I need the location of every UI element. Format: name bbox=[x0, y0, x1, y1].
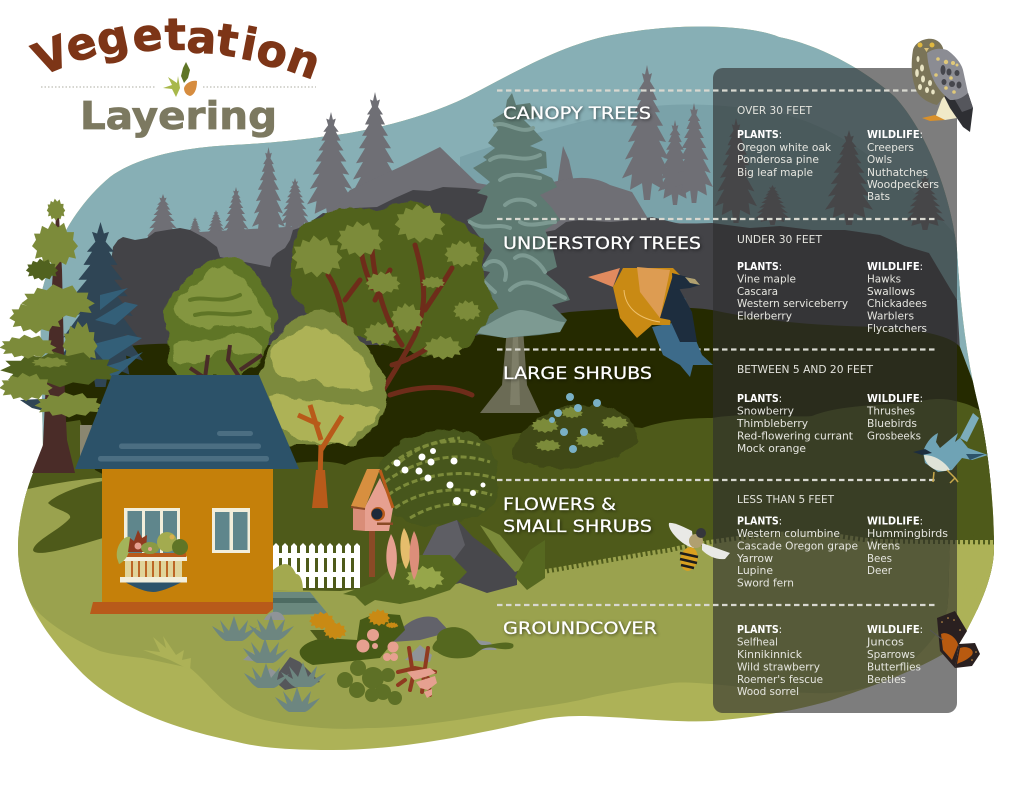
details: understory trees: Swallows bbox=[867, 286, 915, 298]
icon: butterfly bbox=[930, 611, 980, 668]
tall spruce bbox=[467, 93, 570, 413]
details: large shrubs: Thimbleberry bbox=[736, 418, 808, 430]
details: canopy trees: Woodpeckers bbox=[867, 179, 939, 191]
details: groundcover: Wood sorrel bbox=[737, 686, 799, 698]
flower box bbox=[117, 530, 188, 592]
details: flowers and small shrubs: Wrens bbox=[867, 540, 900, 552]
details: understory trees: Chickadees bbox=[867, 298, 927, 310]
snowberry shrub with blue berries bbox=[512, 393, 640, 468]
details: canopy trees: OVER 30 FEET bbox=[737, 105, 813, 117]
birdhouse bbox=[351, 469, 393, 577]
details: groundcover: Butterflies bbox=[867, 662, 921, 674]
details: flowers and small shrubs: PLANTS: bbox=[737, 516, 782, 528]
details: flowers and small shrubs: Deer bbox=[867, 565, 893, 577]
dark grey treeline bbox=[100, 187, 960, 360]
details: canopy trees: Bats bbox=[867, 191, 890, 203]
roof highlights bbox=[98, 431, 269, 462]
layer heading: flowers and small shrubs: FLOWERS & bbox=[503, 495, 616, 515]
layer heading: groundcover: GROUNDCOVER bbox=[503, 619, 657, 639]
light ground bbox=[0, 478, 950, 729]
red and pink plant bbox=[398, 648, 437, 698]
details: large shrubs: Snowberry bbox=[737, 406, 794, 418]
details: large shrubs bbox=[736, 364, 923, 455]
layer heading: large shrubs: LARGE SHRUBS bbox=[503, 364, 652, 384]
details: understory trees: PLANTS: bbox=[737, 261, 782, 273]
distant grey forest bbox=[145, 65, 945, 254]
white flowering shrub bbox=[378, 429, 499, 526]
dark ground bbox=[40, 307, 995, 490]
picket fence bbox=[273, 543, 360, 588]
details: flowers and small shrubs: Cascade Oregon grape bbox=[737, 540, 858, 552]
scene: mountains, treeline and dark ground bbox=[40, 147, 995, 490]
details: canopy trees bbox=[737, 105, 939, 203]
house roof bbox=[75, 375, 299, 469]
window left bbox=[124, 508, 180, 558]
lupine flowers and foliage bbox=[343, 528, 467, 606]
details: large shrubs: Bluebirds bbox=[867, 418, 917, 430]
details: large shrubs: Thrushes bbox=[866, 406, 915, 418]
marigolds and moss bbox=[300, 609, 405, 665]
details: groundcover bbox=[737, 624, 923, 698]
sky band bbox=[460, 105, 960, 300]
arbutus tree bbox=[290, 200, 497, 395]
details: groundcover: Roemer's fescue bbox=[737, 674, 823, 686]
ground shadow blob bbox=[33, 481, 103, 553]
title word: Layering: Layering bbox=[80, 94, 277, 138]
lobed plant bbox=[337, 660, 402, 705]
trailing green plant bbox=[432, 627, 514, 658]
layer heading: flowers and small shrubs: SMALL SHRUBS bbox=[503, 517, 652, 537]
small rocks bbox=[243, 612, 497, 690]
icon: hawk in flight bbox=[588, 267, 713, 377]
details: flowers and small shrubs: Sword fern bbox=[737, 578, 794, 590]
icon: bee bbox=[669, 523, 730, 573]
details: understory trees: Elderberry bbox=[737, 310, 792, 322]
title bbox=[26, 9, 327, 138]
details: groundcover: Beetles bbox=[867, 674, 906, 686]
dotted rule bbox=[41, 86, 316, 88]
details: groundcover: PLANTS: bbox=[737, 624, 782, 636]
grass fringe bbox=[512, 531, 995, 574]
details: flowers and small shrubs: Western columbine bbox=[737, 528, 840, 540]
details: large shrubs: WILDLIFE: bbox=[867, 393, 923, 405]
info panel bbox=[713, 68, 957, 713]
details: understory trees: Western serviceberry bbox=[737, 298, 848, 310]
details: groundcover: WILDLIFE: bbox=[867, 624, 923, 636]
details: understory trees: Hawks bbox=[867, 274, 901, 286]
grass tufts bbox=[144, 636, 191, 668]
divider lines bbox=[497, 90, 937, 605]
bush by the step bbox=[273, 564, 303, 591]
agave plants bbox=[212, 615, 326, 712]
round tree bbox=[166, 258, 277, 378]
rock with fern bbox=[420, 520, 545, 593]
light tree with orange trunk bbox=[261, 310, 386, 508]
icon: owl bbox=[912, 39, 973, 132]
details: large shrubs: Red-flowering currant bbox=[737, 430, 853, 442]
details: canopy trees: Big leaf maple bbox=[737, 167, 813, 179]
blue conifer bbox=[20, 222, 143, 415]
details: groundcover: Sparrows bbox=[867, 649, 915, 661]
details: understory trees: UNDER 30 FEET bbox=[737, 234, 823, 246]
details: groundcover: Wild strawberry bbox=[737, 662, 820, 674]
icon: blue jay bbox=[913, 413, 988, 483]
details: flowers and small shrubs: LESS THAN 5 FEET bbox=[737, 494, 835, 506]
house wall bbox=[102, 469, 273, 602]
layer heading: understory trees: UNDERSTORY TREES bbox=[503, 234, 701, 254]
details: understory trees bbox=[737, 234, 927, 335]
details: understory trees: Flycatchers bbox=[867, 323, 927, 335]
steps bbox=[273, 592, 328, 615]
details: understory trees: Cascara bbox=[737, 286, 778, 298]
details: flowers and small shrubs bbox=[736, 494, 948, 590]
details: canopy trees: Owls bbox=[867, 154, 892, 166]
house bbox=[75, 375, 328, 615]
groundcover garden bbox=[212, 609, 514, 712]
details: understory trees: Warblers bbox=[867, 310, 914, 322]
details: canopy trees: PLANTS: bbox=[737, 129, 782, 141]
details: flowers and small shrubs: Yarrow bbox=[736, 553, 774, 565]
details: canopy trees: WILDLIFE: bbox=[867, 129, 923, 141]
details: large shrubs: Grosbeeks bbox=[867, 430, 921, 442]
title word: Vegetation: Vegetation bbox=[26, 9, 327, 90]
layer heading: canopy trees: CANOPY TREES bbox=[503, 104, 651, 124]
details: canopy trees: Ponderosa pine bbox=[737, 154, 819, 166]
foundation bbox=[90, 602, 273, 614]
details: large shrubs: Mock orange bbox=[737, 443, 806, 455]
details: canopy trees: Oregon white oak bbox=[737, 142, 831, 154]
details: flowers and small shrubs: Lupine bbox=[737, 565, 773, 577]
details: flowers and small shrubs: WILDLIFE: bbox=[867, 516, 923, 528]
left conifer bbox=[0, 199, 120, 473]
details: canopy trees: Creepers bbox=[867, 142, 914, 154]
details: large shrubs: PLANTS: bbox=[737, 393, 782, 405]
details: groundcover: Juncos bbox=[866, 636, 904, 648]
details: understory trees: Vine maple bbox=[737, 274, 796, 286]
icon: leaves bbox=[163, 62, 197, 97]
mid ground and hedge bbox=[0, 399, 1000, 729]
details: large shrubs: BETWEEN 5 AND 20 FEET bbox=[737, 364, 874, 376]
details: understory trees: WILDLIFE: bbox=[867, 261, 923, 273]
details: groundcover: Kinnikinnick bbox=[737, 649, 802, 661]
details: groundcover: Selfheal bbox=[737, 636, 778, 648]
details: flowers and small shrubs: Hummingbirds bbox=[867, 528, 948, 540]
details: flowers and small shrubs: Bees bbox=[867, 553, 892, 565]
details: canopy trees: Nuthatches bbox=[867, 167, 928, 179]
window right bbox=[212, 508, 250, 553]
